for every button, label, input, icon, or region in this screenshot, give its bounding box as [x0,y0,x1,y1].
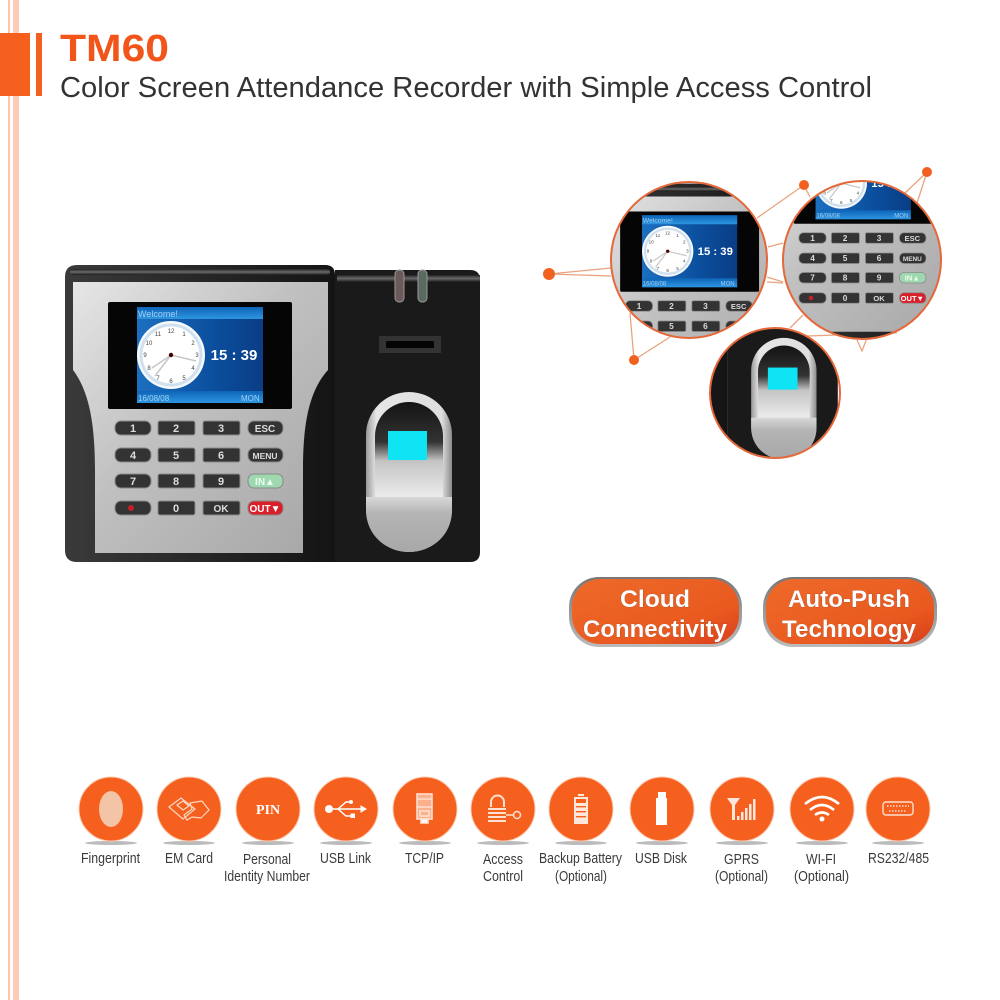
magnified circle: screen: 7 [657,266,660,271]
device photo: 8 [147,366,151,372]
feature: RS232/485: RS232/485 [868,850,929,867]
device photo: OUT▼ [249,504,281,515]
magnified circle: keypad: 9 [877,274,882,283]
magnified circle: screen: 3 [686,249,689,254]
device photo: 7 [130,476,136,488]
magnified circle: screen: 1 [676,233,679,238]
device photo: 3 [195,353,199,359]
device photo: 16/08/08 [138,394,170,403]
device photo: 0 [173,503,179,515]
magnified circle: keypad: 6 [877,254,882,263]
device photo: 12 [168,329,175,335]
icon: PIN text: PIN [256,803,280,818]
magnified circle: screen: 11 [656,233,661,238]
magnified circle: screen: 9 [647,249,650,254]
magnified circle: keypad: 5 [850,198,853,203]
feature: USB disk: USB Disk [635,850,687,867]
device photo: 7 [156,376,160,382]
magnified circle: keypad: 8 [823,191,826,195]
badge: cloud connectivity: Connectivity [583,616,727,643]
feature: access control: Access [483,851,523,868]
icon: antenna and signal bars [727,798,756,820]
magnified circle: keypad: 7 [830,198,833,203]
device photo: 4 [191,366,195,372]
magnified circle: keypad [782,180,942,340]
feature: Wi-Fi: (Optional) [794,868,849,885]
device photo: 15 : 39 [211,347,257,364]
device photo: IN▲ [255,477,275,488]
magnified circle: screen: Welcome! [643,218,673,225]
badge: auto-push technology [763,577,937,647]
feature: GPRS [710,777,774,885]
magnified circle: screen: 15 : 39 [698,246,733,258]
device photo: 6 [218,450,224,462]
device photo: 5 [173,450,179,462]
icon: wifi arcs [805,797,839,822]
feature: backup battery: Backup Battery [539,850,622,867]
device photo: 1 [182,332,186,338]
feature: fingerprint [79,777,143,867]
feature: EM card: EM Card [165,850,213,867]
magnified circle: keypad: OK [873,294,885,303]
badge: auto-push technology: Technology [782,616,916,643]
device photo: 5 [182,376,186,382]
magnified circle: keypad: MON [894,214,908,220]
feature: USB disk [630,777,694,867]
device photo: 2 [173,423,179,435]
magnified circle: keypad: 15 : 39 [871,178,907,190]
icon: serial port [883,802,913,815]
badge: auto-push technology: Auto-Push [788,586,910,613]
magnified circle: screen: 5 [676,266,679,271]
device photo: 3 [218,423,224,435]
device photo: 4 [130,450,137,462]
device photo: MENU [252,451,278,461]
magnified circle: screen: 6 [703,322,708,331]
title: TM60 [60,28,169,70]
magnified circle: screen: 16/08/08 [643,282,667,288]
magnified circle: screen: 10 [649,240,654,245]
feature: GPRS: GPRS [724,851,759,868]
magnified circle: screen [610,181,768,339]
magnified circle: keypad: ESC [905,234,921,243]
icon: USB trident [326,800,366,818]
feature: USB link: USB Link [320,850,371,867]
feature: PIN: Personal [243,851,291,868]
magnified circle: keypad: 5 [843,254,848,263]
magnified circle: keypad: 6 [840,200,843,205]
magnified circle: keypad: 7 [810,274,815,283]
feature: Wi-Fi: WI-FI [806,851,836,868]
magnified circle: fingerprint sensor [709,327,841,459]
feature: RS232/485 [866,777,930,867]
feature: fingerprint: Fingerprint [81,850,141,867]
magnified circle: screen: 6 [666,268,669,273]
magnified circle: screen: 8 [650,259,653,263]
device photo: MON [241,394,260,403]
magnified circle: screen: 12 [665,231,671,236]
icon: padlock and key [488,796,520,821]
magnified circle: keypad: OUT▼ [901,294,924,303]
feature: PIN [224,777,310,885]
magnified circle: keypad: 8 [843,274,848,283]
magnified circle: screen: 5 [669,322,674,331]
device photo: 9 [218,476,224,488]
device photo: 10 [146,341,153,347]
device photo: 2 [191,341,195,347]
feature: access control [471,777,535,885]
device photo: 9 [143,353,147,359]
device photo: 8 [173,476,179,488]
feature: TCP/IP [393,777,457,867]
icon: fingerprint [99,791,123,827]
magnified circle: screen: 4 [683,259,686,263]
feature: Wi-Fi [790,777,854,885]
callout connector lines [549,172,927,360]
magnified circle: screen: 2 [669,302,674,311]
magnified circle: keypad: IN▲ [905,274,920,283]
device photo: Welcome! [138,309,178,319]
device photo: OK [214,504,229,515]
callout dots [543,167,932,365]
magnified circle: keypad: MENU [903,256,922,263]
device photo: ESC [255,424,275,435]
magnified circle: keypad: 4 [857,191,860,195]
feature: access control: Control [483,868,523,885]
icon: battery [574,794,588,824]
device photo: 1 [130,423,136,435]
feature: PIN: Identity Number [224,868,310,885]
subtitle: Color Screen Attendance Recorder with Simple Access Control [60,72,872,104]
magnified circle: keypad: 1 [810,234,815,243]
device photo [65,265,480,562]
header accent block [0,33,42,96]
icon: USB stick [656,792,667,825]
icon: ethernet plug [417,794,432,823]
icon: card and hand [169,798,209,820]
magnified circle: screen: ESC [731,302,747,311]
magnified circle: screen: 1 [637,302,642,311]
magnified circle: screen: 3 [703,302,708,311]
badge: cloud connectivity: Cloud [620,586,690,613]
magnified circle: screen: 2 [683,240,686,245]
magnified circle: keypad: 0 [843,294,848,303]
magnified circle: screen: MON [721,282,735,288]
device photo: 6 [169,379,173,385]
background stripes [8,0,19,1000]
magnified circle: keypad: 3 [877,234,882,243]
feature: EM card [157,777,221,867]
feature: backup battery: (Optional) [555,868,607,885]
feature: backup battery [539,777,622,885]
feature: USB link [314,777,378,867]
feature: GPRS: (Optional) [715,868,768,885]
magnified circle: keypad: 2 [843,234,848,243]
feature: TCP/IP: TCP/IP [405,850,444,867]
badge: cloud connectivity [569,577,742,647]
magnified circle: keypad: 4 [810,254,815,263]
magnified circle: keypad: 16/08/08 [816,214,840,220]
device photo: 11 [155,332,162,338]
